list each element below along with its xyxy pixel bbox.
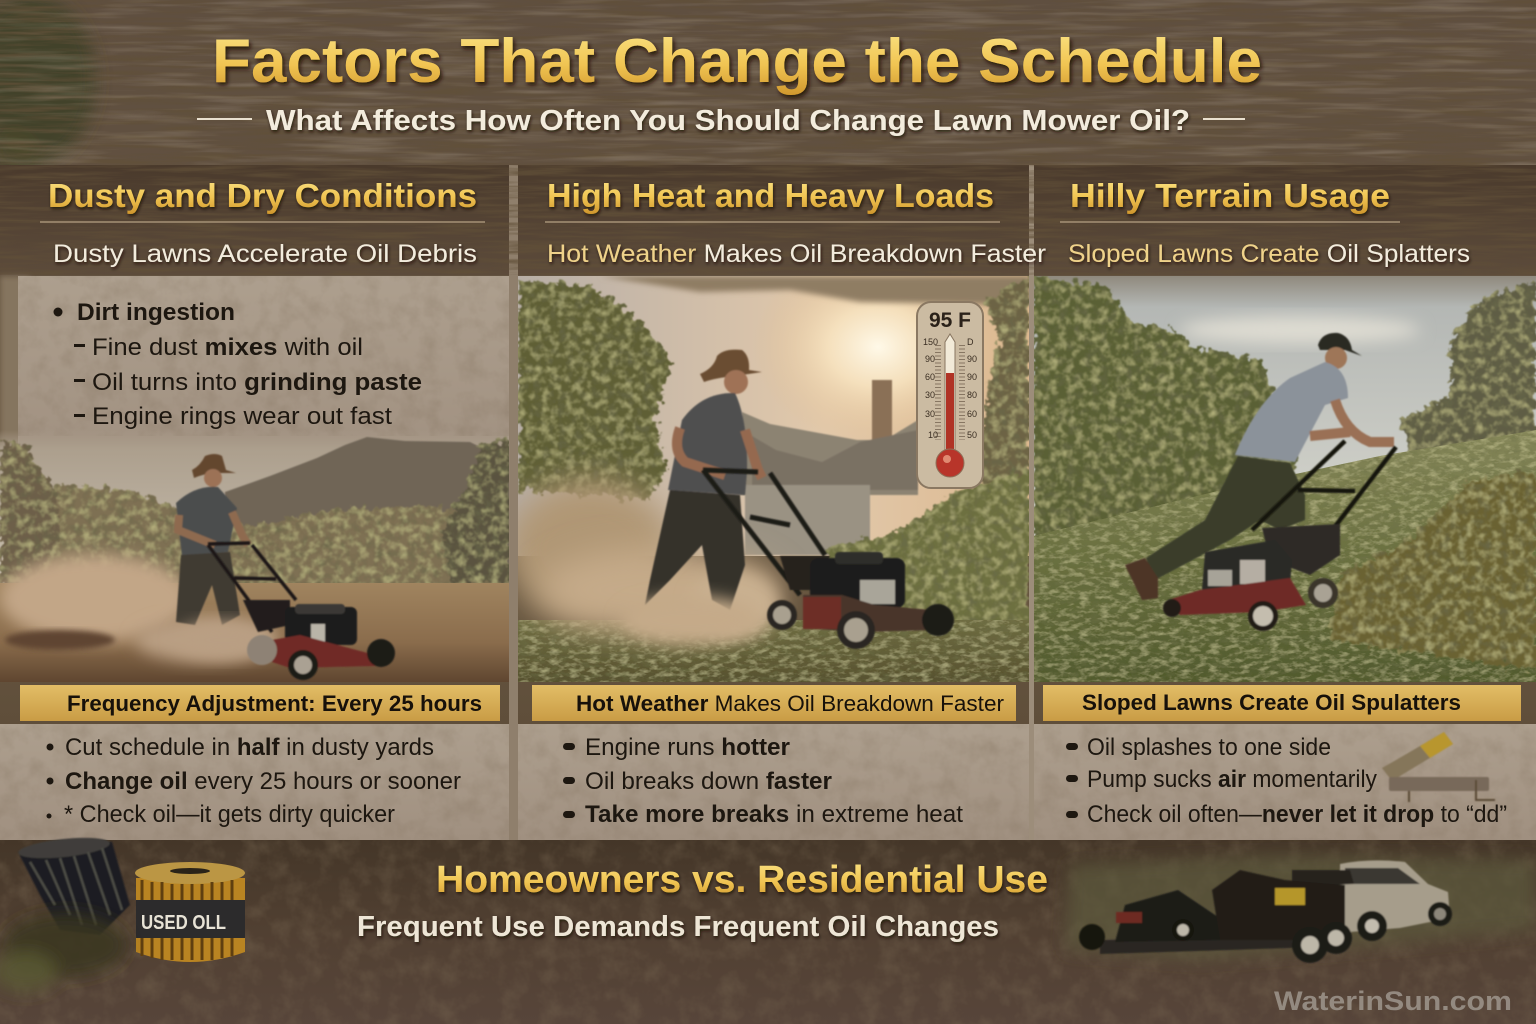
illustration: truck and trailer with mowers xyxy=(1079,860,1452,963)
icon: thermometer 95 F: 95 F xyxy=(929,309,971,332)
banner text: hot weather: Hot Weather Makes Oil Breakdown Faster xyxy=(576,691,1004,716)
mower xyxy=(208,543,395,680)
man pushing mower xyxy=(645,350,762,610)
heading: dusty and dry conditions: Dusty and Dry Conditions xyxy=(48,177,477,214)
house xyxy=(740,380,918,555)
icon: thermometer 95 F: 80 xyxy=(967,390,977,400)
bullets: panel 1 lower: * Check oil—it gets dirty quicker xyxy=(64,801,395,828)
banner text: frequency adjustment: Frequency Adjustment: Every 25 hours xyxy=(67,691,482,716)
heading: hilly terrain usage xyxy=(1060,177,1470,268)
heading: high heat and heavy loads: Hot Weather Makes Oil Breakdown Faster xyxy=(547,240,1046,268)
panel 2 lower text area xyxy=(518,724,1030,840)
panel: dusty and dry conditions xyxy=(0,165,510,840)
bullets: dirt ingestion: Engine rings wear out fast xyxy=(92,403,392,430)
bottom band: dirt ground xyxy=(0,840,1536,1024)
banner panel 1 xyxy=(20,685,500,721)
icon: dipstick and oil tube xyxy=(1382,732,1495,802)
gold banners row xyxy=(20,685,1521,721)
panel separators xyxy=(509,165,1034,840)
wood grain overlay xyxy=(0,0,1536,275)
icon: thermometer 95 F: 60 xyxy=(967,409,977,419)
mower xyxy=(703,470,954,649)
illustration: black oil filter xyxy=(17,834,130,935)
bullets: panel 1 lower xyxy=(46,734,461,828)
icon: thermometer 95 F xyxy=(917,302,983,488)
icon: thermometer 95 F: 90 xyxy=(925,354,935,364)
title: Factors That Change the Schedule xyxy=(212,27,1262,96)
panel 1 lower text texture xyxy=(0,724,510,840)
icon: thermometer 95 F: 150 xyxy=(923,337,938,347)
bullets: panel 3 lower: Check oil often—never let it drop to “dd” xyxy=(1087,801,1507,828)
icon: thermometer 95 F: 30 xyxy=(925,390,935,400)
banner panel 2 xyxy=(532,685,1016,721)
icon: thermometer 95 F: 30 xyxy=(925,409,935,419)
bullets: panel 3 lower: Oil splashes to one side xyxy=(1087,734,1331,761)
panel 1 header band xyxy=(0,165,510,275)
panel: hilly terrain usage xyxy=(1033,165,1536,840)
panel 1 lower text area xyxy=(0,724,510,840)
heading: hilly terrain usage: Sloped Lawns Create Oil Splatters xyxy=(1068,240,1470,268)
bullets: panel 2 lower: Take more breaks in extreme heat xyxy=(585,801,963,828)
panel 1 text texture xyxy=(18,276,510,436)
bottom subheading: Frequent Use Demands Frequent Oil Changes xyxy=(357,911,999,943)
heading: dusty and dry conditions: Dusty Lawns Accelerate Oil Debris xyxy=(53,240,477,268)
panel 2 photo: hot weather mowing xyxy=(505,247,1030,682)
panel 1 photo: mower in dust xyxy=(0,430,510,682)
heading: dusty and dry conditions xyxy=(40,177,485,268)
corner foliage xyxy=(0,0,96,230)
icon: thermometer 95 F: 50 xyxy=(967,430,977,440)
bullets: panel 3 lower: Pump sucks air momentarily xyxy=(1087,766,1377,793)
panel 3 header band xyxy=(1033,165,1536,275)
panel 2 header band xyxy=(518,165,1030,275)
heading: hilly terrain usage: Hilly Terrain Usage xyxy=(1070,177,1390,214)
heading: high heat and heavy loads xyxy=(545,177,1046,268)
panel: high heat and heavy loads xyxy=(505,165,1030,840)
icon: thermometer 95 F: D xyxy=(967,337,974,347)
banner text: sloped lawns: Sloped Lawns Create Oil Spulatters xyxy=(1082,690,1461,715)
bullets: dirt ingestion: Fine dust mixes with oil xyxy=(92,334,363,361)
panel 3 lower text texture xyxy=(1033,724,1536,840)
heading: high heat and heavy loads: High Heat and Heavy Loads xyxy=(547,177,994,214)
icon: thermometer 95 F: 60 xyxy=(925,372,935,382)
bullets: panel 2 lower: Engine runs hotter xyxy=(585,734,790,761)
subtitle: What Affects How Often You Should Change Lawn Mower Oil? xyxy=(266,105,1190,137)
ground grain overlay xyxy=(0,840,1536,1024)
man pushing mower xyxy=(176,454,248,625)
banner panel 3 xyxy=(1043,685,1521,721)
watermark: WaterinSun.com xyxy=(1274,986,1512,1016)
wood highlight overlay xyxy=(0,0,1536,165)
panel 3 lower text area xyxy=(1033,724,1536,840)
illustration: used oil filter: USED OLL xyxy=(141,912,226,934)
icon: thermometer 95 F: 90 xyxy=(967,354,977,364)
panel 1 text area xyxy=(18,276,510,466)
icon: thermometer 95 F: 90 xyxy=(967,372,977,382)
man pushing mower xyxy=(1125,333,1394,600)
bullets: panel 3 lower xyxy=(1066,734,1507,828)
panel 2 lower text texture xyxy=(518,724,1030,840)
panel 3 photo: sloped lawn xyxy=(1033,276,1536,682)
bottom heading: Homeowners vs. Residential Use xyxy=(436,859,1048,901)
panel 1 left edge xyxy=(0,276,30,466)
illustration: used oil filter xyxy=(135,862,245,962)
bullets: panel 1 lower: Change oil every 25 hours or sooner xyxy=(65,768,461,795)
bullets: dirt ingestion xyxy=(54,299,422,430)
bullets: panel 2 lower: Oil breaks down faster xyxy=(585,768,832,795)
bullets: dirt ingestion: Dirt ingestion xyxy=(77,299,235,326)
bullets: panel 2 lower xyxy=(563,734,963,828)
icon: thermometer 95 F: 10 xyxy=(928,430,938,440)
brush behind truck xyxy=(1065,855,1536,960)
roadside weeds xyxy=(0,913,127,992)
mower xyxy=(1163,441,1396,631)
bullets: panel 1 lower: Cut schedule in half in dusty yards xyxy=(65,734,434,761)
bullets: dirt ingestion: Oil turns into grinding paste xyxy=(92,369,422,396)
